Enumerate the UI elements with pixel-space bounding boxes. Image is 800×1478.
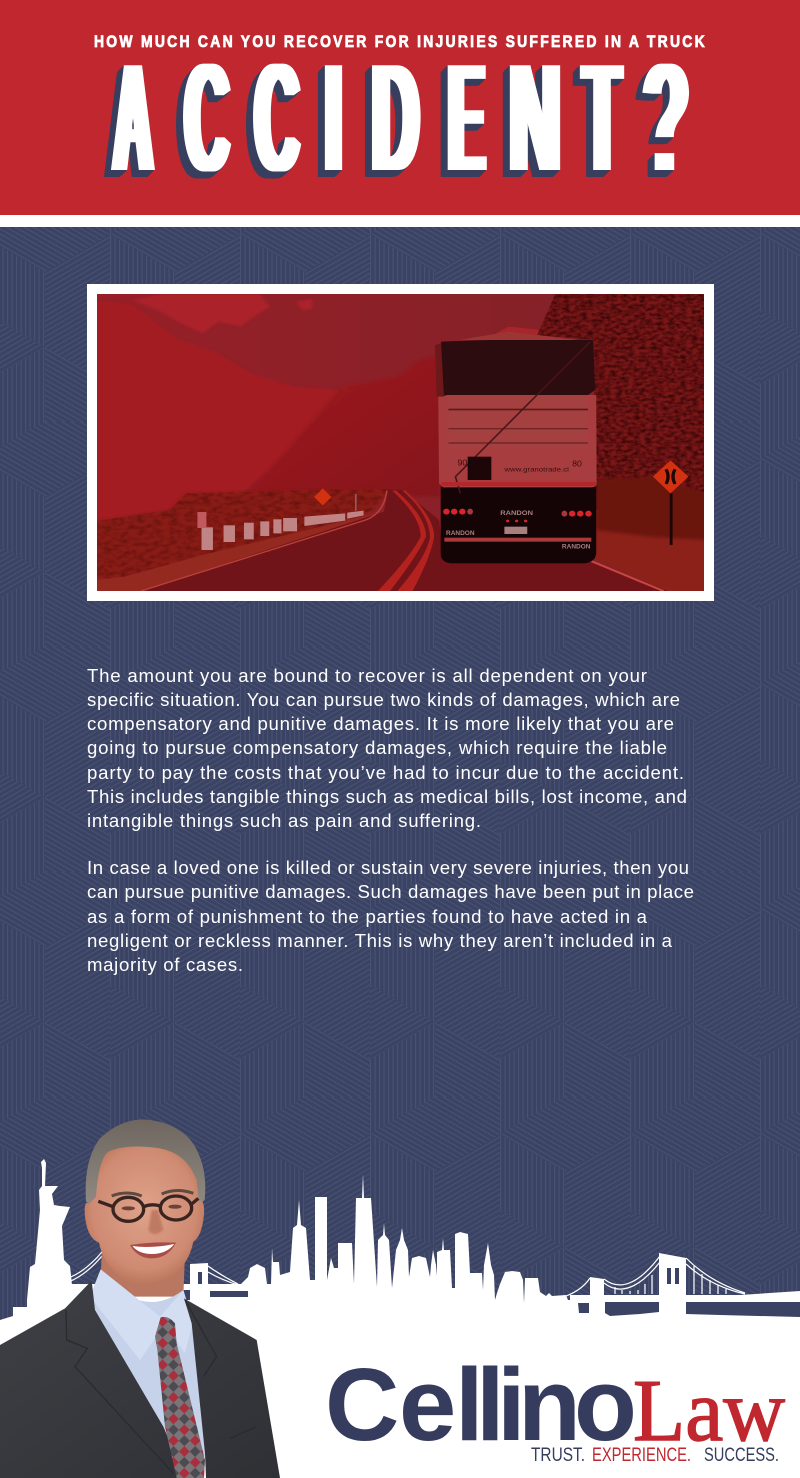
subtitle: HOW MUCH CAN YOU RECOVER FOR INJURIES SUFFERED IN A TRUCK <box>94 33 705 51</box>
paragraph two: can pursue punitive damages. Such damages have been put in place <box>87 881 694 902</box>
header band <box>0 0 800 227</box>
paragraph one: specific situation. You can pursue two kinds of damages, which are <box>87 689 680 710</box>
face <box>85 1146 204 1285</box>
left bridge behind portrait <box>68 1252 250 1330</box>
photo frame <box>87 284 714 601</box>
strap <box>455 342 590 493</box>
white city skyline footer <box>0 1159 800 1478</box>
paragraph two: negligent or reckless manner. This is why they aren’t included in a <box>87 930 673 951</box>
tie <box>155 1317 205 1478</box>
right verge <box>594 530 704 591</box>
shirt <box>90 1269 207 1457</box>
hair <box>86 1120 205 1207</box>
road markings <box>141 491 664 591</box>
paragraph one: This includes tangible things such as medical bills, lost income, and <box>87 786 687 807</box>
truck: www.granotrade.cl <box>503 466 569 473</box>
clouds <box>133 294 313 333</box>
wordmark: Law: Law <box>633 1363 785 1460</box>
tagline: TRUST. <box>531 1445 585 1466</box>
right rock face <box>537 294 704 490</box>
paragraph one: compensatory and punitive damages. It is more likely that you are <box>87 713 674 734</box>
right road sign <box>653 460 688 545</box>
roadside bollards <box>197 511 364 550</box>
glasses <box>98 1196 198 1221</box>
tagline <box>531 1445 779 1466</box>
Brooklyn bridge, right <box>570 1253 800 1316</box>
brand plates: RANDON <box>562 543 591 550</box>
eyebrows <box>112 1190 193 1196</box>
lapels <box>66 1300 257 1473</box>
brand plates: RANDON <box>500 510 533 517</box>
red title panel <box>0 0 800 215</box>
paragraph two: as a form of punishment to the parties found to have acted in a <box>87 906 648 927</box>
paragraph two: majority of cases. <box>87 954 243 975</box>
neck <box>100 1253 185 1297</box>
nose and cheek shading <box>148 1210 163 1234</box>
brand plates <box>446 510 591 550</box>
portrait of attorney <box>0 1120 280 1478</box>
truck <box>435 332 597 563</box>
paragraph two <box>87 857 694 975</box>
paragraph one: intangible things such as pain and suffering. <box>87 810 481 831</box>
small road sign <box>314 488 331 506</box>
paragraph one: The amount you are bound to recover is all dependent on your <box>87 665 647 686</box>
Cellino Law logo <box>325 1347 786 1466</box>
paragraph one: party to pay the costs that you’ve had to incur due to the accident. <box>87 762 684 783</box>
eyes and mouth <box>122 1205 182 1258</box>
paragraph one: going to pursue compensatory damages, which require the liable <box>87 737 667 758</box>
main title: ACCIDENT?: ? <box>643 30 689 206</box>
red-tinted photo of truck on mountain road <box>97 294 704 591</box>
truck: 90 <box>457 458 467 467</box>
bumper <box>444 538 591 542</box>
main title: ACCIDENT?: E <box>449 30 484 207</box>
truck: 80 <box>572 459 582 468</box>
tail lights <box>443 509 592 522</box>
sky <box>97 294 704 591</box>
main title: ACCIDENT?: N <box>510 29 560 206</box>
main title: ACCIDENT?: A <box>114 30 152 207</box>
left hillside scrub <box>97 489 388 580</box>
main title: ACCIDENT?: C <box>255 31 299 206</box>
body copy <box>87 665 694 975</box>
collar <box>90 1269 193 1360</box>
main title: ACCIDENT?: D <box>372 29 419 206</box>
paragraph one <box>87 665 687 831</box>
wordmark: Cellino: Cellino <box>325 1347 637 1462</box>
main title: ACCIDENT?: C <box>185 31 229 206</box>
main title: ACCIDENT? <box>114 29 689 207</box>
tagline: EXPERIENCE. <box>592 1445 691 1466</box>
truck body <box>438 395 597 487</box>
logo and website <box>468 457 491 480</box>
tarp <box>441 339 595 397</box>
paragraph two: In case a loved one is killed or sustain very severe injuries, then you <box>87 857 689 878</box>
main title: ACCIDENT?: T <box>584 31 620 206</box>
left mountain <box>92 300 341 523</box>
middle mountain <box>243 355 441 497</box>
road <box>141 489 668 591</box>
suit <box>0 1281 280 1478</box>
truck chassis <box>441 487 596 563</box>
brand plates: RANDON <box>446 530 475 537</box>
main title: ACCIDENT?: I <box>326 30 341 207</box>
tagline: SUCCESS. <box>704 1445 779 1466</box>
skyline silhouette <box>0 1159 800 1478</box>
